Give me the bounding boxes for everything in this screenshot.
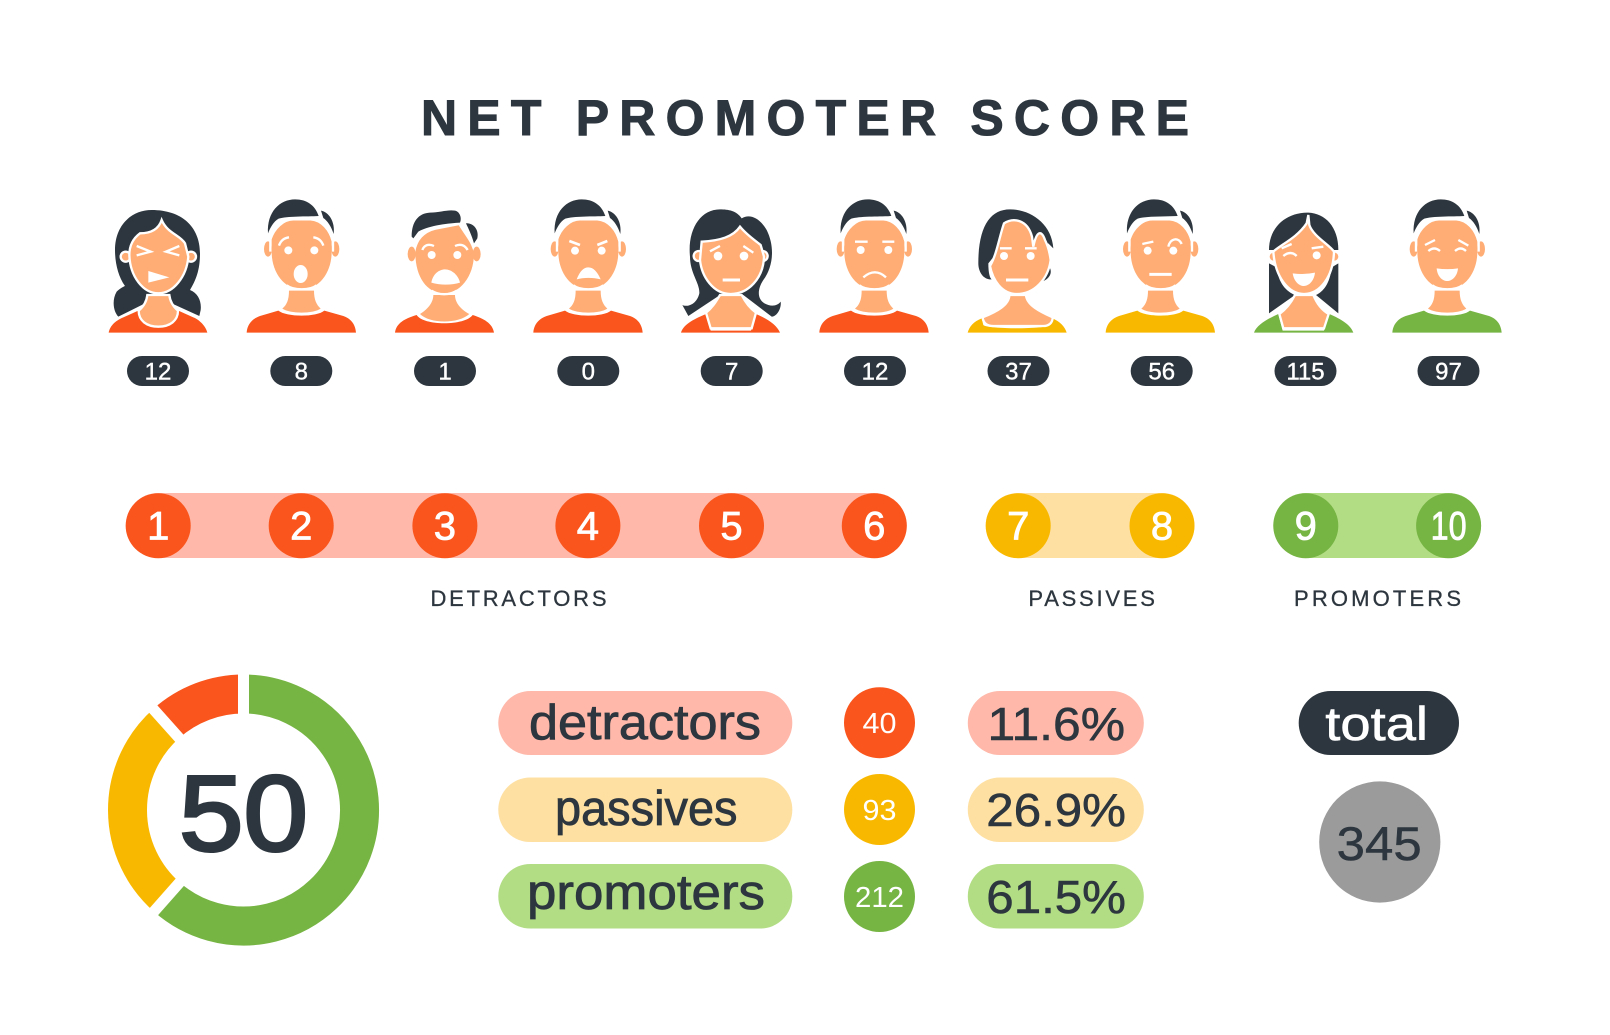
score scale: passives 7-8: 8: [1151, 504, 1173, 548]
badge: score 6 count: [844, 356, 906, 386]
badge: score 6 count: 12: [862, 358, 888, 386]
total pill: [1299, 691, 1459, 755]
score scale: detractors 1-6: 1: [147, 504, 169, 548]
avatar row: ten respondents: [109, 199, 1502, 333]
badge: score 1 count: [127, 356, 189, 386]
badge: score 3 count: [414, 356, 476, 386]
legend pill: passives: [498, 778, 792, 842]
score scale: detractors 1-6: 6: [863, 504, 885, 548]
avatar 5: worried woman: [681, 209, 781, 333]
score scale: detractors 1-6: 4: [577, 504, 599, 548]
score scale: promoters 9-10: 9: [1295, 504, 1317, 548]
response count badges: [127, 356, 1480, 386]
badge: score 9 count: 115: [1286, 358, 1325, 386]
badge: score 2 count: [270, 356, 332, 386]
badge: score 9 count: [1274, 356, 1336, 386]
percent pill: promoters: 61.5%: [986, 871, 1126, 923]
donut chart: NPS 50: 50: [179, 752, 308, 874]
legend pill: promoters: promoters: [527, 866, 765, 920]
avatar 4: annoyed man: [533, 199, 643, 333]
percent pill: passives: [968, 778, 1144, 842]
badge: score 5 count: 7: [725, 358, 738, 386]
score scale: promoters 9-10: 10: [1431, 504, 1467, 548]
score scale: detractors 1-6: 5: [720, 504, 743, 548]
badge: score 8 count: [1131, 356, 1193, 386]
scale label: passives: PASSIVES: [1028, 586, 1155, 611]
badge: score 10 count: 97: [1435, 358, 1462, 386]
count circle: passives: 93: [862, 795, 896, 827]
percent pill: detractors: [968, 691, 1144, 755]
total value circle: 345: [1337, 817, 1422, 870]
badge: score 4 count: [557, 356, 619, 386]
badge: score 7 count: [988, 356, 1050, 386]
legend pill: passives: passives: [555, 782, 738, 836]
total value circle: [1319, 781, 1440, 903]
avatar 6: sad man: [819, 199, 929, 333]
score scale: detractors 1-6: 3: [434, 504, 456, 548]
count circle: passives: [844, 774, 915, 845]
avatar 3: scared man: [395, 210, 494, 333]
donut chart: NPS 50: [128, 668, 360, 926]
count circle: detractors: [844, 687, 915, 758]
avatar 9: smiling woman: [1254, 213, 1353, 333]
percent pill: promoters: [968, 864, 1144, 928]
badge: score 10 count: [1418, 356, 1480, 386]
legend pill: detractors: detractors: [529, 696, 761, 750]
avatar 2: shocked man: [247, 199, 356, 333]
avatar 1: angry woman: [109, 210, 207, 333]
badge: score 2 count: 8: [295, 358, 308, 386]
score scale: detractors 1-6: 2: [290, 504, 312, 548]
score scale: passives 7-8: [986, 493, 1194, 558]
scale label: promoters: PROMOTERS: [1294, 586, 1461, 611]
count circle: promoters: [844, 861, 915, 932]
avatar 10: laughing man: [1392, 199, 1502, 333]
badge: score 4 count: 0: [582, 358, 595, 386]
total pill: total: [1325, 697, 1428, 750]
percent pill: detractors: 11.6%: [988, 698, 1125, 750]
count circle: detractors: 40: [862, 708, 896, 740]
count circle: promoters: 212: [855, 882, 904, 914]
badge: score 5 count: [701, 356, 763, 386]
badge: score 8 count: 56: [1148, 358, 1175, 386]
avatar 7: neutral woman: [968, 209, 1067, 333]
percent pill: passives: 26.9%: [986, 784, 1126, 836]
score scale: passives 7-8: 7: [1007, 504, 1029, 548]
scale label: detractors: DETRACTORS: [430, 586, 606, 611]
legend pill: detractors: [498, 691, 792, 755]
badge: score 7 count: 37: [1005, 358, 1032, 386]
badge: score 3 count: 1: [438, 358, 452, 386]
score scale: detractors 1-6: [126, 493, 907, 558]
avatar 8: skeptical man: [1106, 199, 1215, 333]
legend pill: promoters: [498, 864, 792, 928]
title: NET PROMOTER SCORE: [421, 90, 1189, 146]
badge: score 1 count: 12: [145, 358, 171, 386]
score scale: promoters 9-10: [1273, 493, 1481, 558]
